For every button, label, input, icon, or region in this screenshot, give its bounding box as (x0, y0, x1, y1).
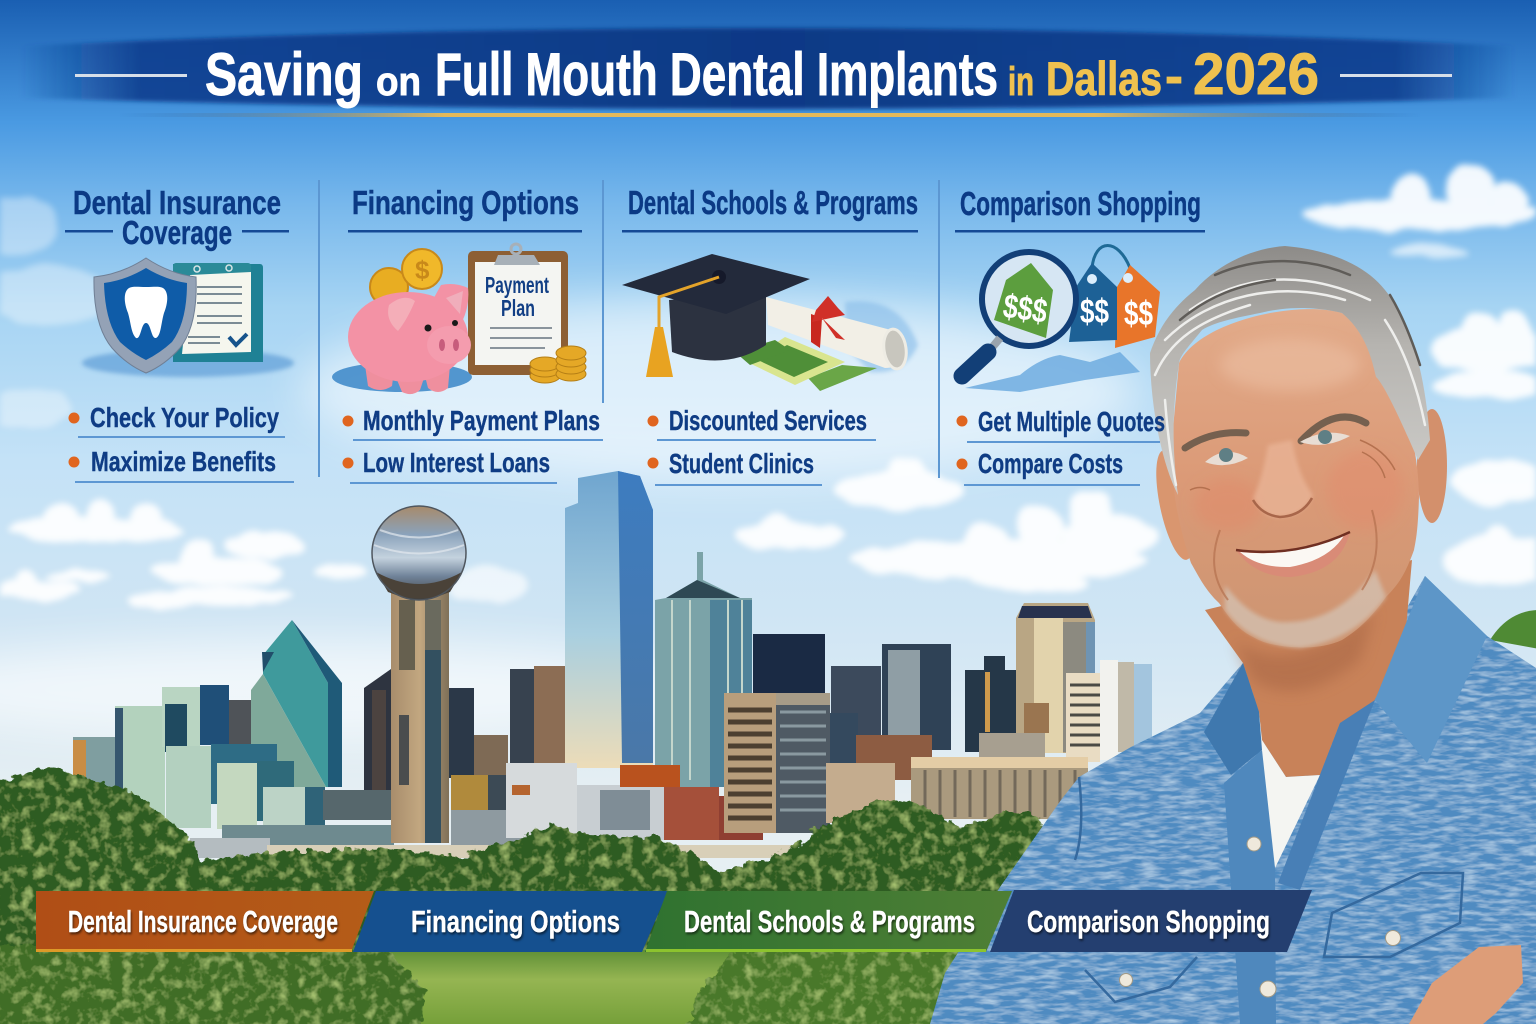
cheeks and shading (1194, 339, 1403, 531)
heading: dental schools and programs: Dental Schools & Programs (628, 184, 918, 221)
tan striped tower (1016, 603, 1095, 753)
soft haze behind panels (0, 300, 1140, 740)
icon: tooth shield and clipboard (82, 258, 294, 377)
trees and park (0, 610, 1536, 1024)
title text: in (1008, 60, 1034, 104)
icon: magnifier and price tags (962, 246, 1160, 392)
long low building (911, 757, 1088, 819)
white t-shirt (1259, 712, 1320, 868)
glass skyscraper (565, 471, 653, 768)
ribbon: financing options: Financing Options (411, 904, 620, 939)
bullet: compare costs: Compare Costs (978, 448, 1123, 479)
bullet: monthly payment plans: Monthly Payment Plans (363, 405, 600, 436)
collars and placket (1204, 663, 1262, 775)
clouds (0, 164, 1536, 608)
title text: - (1165, 48, 1183, 104)
Dallas skyline (73, 471, 1152, 858)
heading: comparison shopping: Comparison Shopping (960, 185, 1201, 222)
panel: dental insurance coverage (65, 184, 294, 483)
eye creases (1190, 440, 1395, 490)
bullet: student clinics: Student Clinics (669, 448, 814, 479)
bullet: maximize benefits (68, 446, 276, 477)
ribbon: comparison shopping: Comparison Shopping (1027, 904, 1270, 939)
panel: comparison shopping (955, 185, 1205, 486)
ribbon: comparison shopping (990, 890, 1312, 952)
tan office block (724, 693, 830, 833)
bullet: low interest loans: Low Interest Loans (363, 447, 550, 478)
heading: financing options: Financing Options (352, 184, 579, 221)
stubble (1225, 570, 1386, 648)
tree line (0, 768, 1060, 1024)
ribbon: dental schools and programs: Dental Schools & Programs (684, 904, 975, 939)
eyebrows (1185, 417, 1366, 448)
ribbon: dental insurance coverage: Dental Insurance Coverage (68, 904, 338, 939)
bottom ribbon (36, 890, 1312, 952)
face (1172, 309, 1419, 647)
denim shirt (930, 576, 1536, 1024)
fountain place tower (251, 620, 342, 787)
ribbon: financing options (353, 891, 668, 952)
bullet: discounted services (648, 405, 867, 436)
ribbon: dental schools and programs (645, 891, 1012, 952)
column dividers (318, 180, 940, 478)
panel: financing options (332, 184, 603, 484)
ribbon: dental insurance coverage (36, 891, 374, 952)
neck (1205, 560, 1412, 777)
reunion tower (372, 506, 466, 843)
icon: piggy bank with payment plan clipboard: Plan (501, 295, 535, 321)
bullet: get multiple quotes (956, 406, 1165, 437)
icon: piggy bank with payment plan clipboard (332, 244, 586, 394)
icon: magnifier and price tags: $$ (1124, 295, 1153, 333)
ears (1417, 409, 1447, 523)
hair (1150, 246, 1430, 495)
icon: magnifier and price tags: $$ (1080, 293, 1109, 331)
bullet: compare costs (956, 448, 1123, 479)
bullet: discounted services: Discounted Services (669, 405, 867, 436)
title text: Saving (205, 41, 363, 108)
title text: on (376, 60, 421, 104)
meadow (380, 950, 770, 1024)
bullet: check your policy: Check Your Policy (90, 402, 279, 433)
panel: dental schools and programs (622, 184, 918, 486)
eyes (1205, 430, 1350, 465)
heading: dental insurance coverage: Dental Insurance (73, 184, 281, 221)
title text: Dallas (1046, 52, 1162, 105)
icon: piggy bank with payment plan clipboard: Payment (485, 272, 549, 298)
icon: graduation cap, diploma and cash (622, 254, 918, 391)
shirt seams, pockets and buttons (1075, 777, 1463, 1002)
bullet: get multiple quotes: Get Multiple Quotes (978, 406, 1165, 437)
icon: magnifier and price tags: $$$ (1001, 287, 1050, 331)
bank tower with crown (655, 552, 752, 787)
title text: 2026 (1193, 42, 1319, 107)
bullet: student clinics (648, 448, 814, 479)
foreground trees (0, 945, 425, 1024)
nose (1253, 440, 1313, 517)
icon: piggy bank with payment plan clipboard: $ (415, 255, 430, 285)
bullet: low interest loans (342, 447, 550, 478)
smiling man in denim shirt (930, 246, 1536, 1024)
title text: Full Mouth Dental Implants (435, 41, 998, 108)
title text (205, 41, 1319, 108)
smile with teeth (1236, 532, 1350, 577)
hand and forearm (1409, 945, 1523, 1024)
panel: dental insurance coverage: Coverage (122, 214, 232, 251)
bullet: maximize benefits: Maximize Benefits (91, 446, 276, 477)
title banner (20, 28, 1516, 117)
smile lines (1214, 510, 1377, 600)
